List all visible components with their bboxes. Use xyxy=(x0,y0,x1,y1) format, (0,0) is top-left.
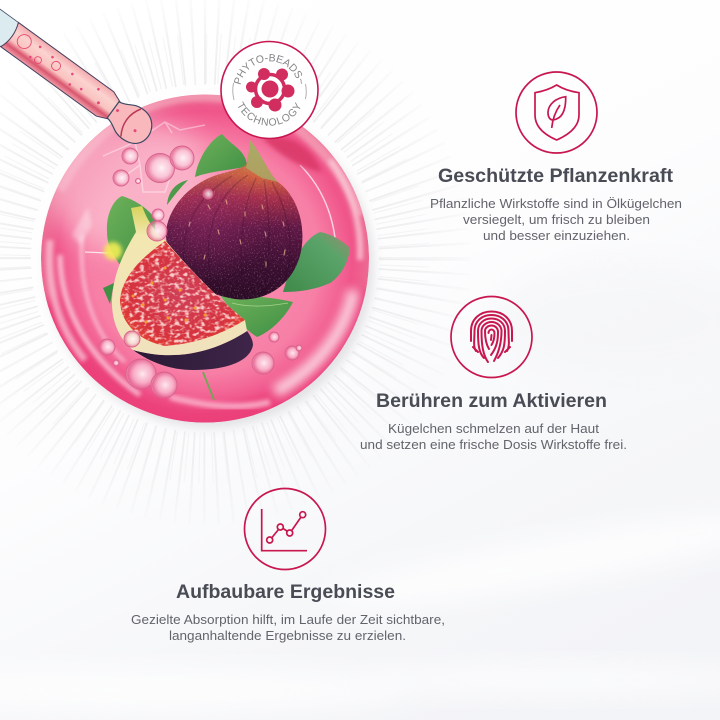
text: Geschützte Pflanzenkraft description: versiegelt, um frisch zu bleiben xyxy=(463,212,650,227)
molecule icon xyxy=(246,68,294,112)
text: Geschützte Pflanzenkraft description: und besser einzuziehen. xyxy=(483,228,630,243)
left white streak xyxy=(60,255,140,395)
icon: growth chart xyxy=(244,488,326,570)
top leaf xyxy=(195,134,247,177)
text: Aufbaubare Ergebnisse description: Gezielte Absorption hilft, im Laufe der Zeit sichtbare, xyxy=(131,612,445,627)
flesh seeds xyxy=(133,268,205,322)
ribs xyxy=(184,175,290,299)
icon: shield with leaf xyxy=(516,72,597,153)
bottom leaf xyxy=(220,295,293,337)
sparkle glow on left leaf xyxy=(104,242,122,260)
sparkle crystal xyxy=(72,207,92,245)
heading: Geschützte Pflanzenkraft: Geschützte Pflanzenkraft xyxy=(438,166,674,187)
radial light rays xyxy=(0,22,439,484)
text: Aufbaubare Ergebnisse description xyxy=(131,612,445,643)
slice cream rim xyxy=(112,206,247,355)
crimson reflection under badge xyxy=(262,137,322,172)
left leaf xyxy=(107,196,156,267)
fig slice xyxy=(112,206,253,370)
sphere shadow xyxy=(46,104,374,428)
stem highlight xyxy=(246,140,278,182)
liquid in tube xyxy=(1,22,124,123)
text: Aufbaubare Ergebnisse description: langanhaltende Ergebnisse zu erzielen. xyxy=(169,628,406,643)
pipette dropper xyxy=(0,0,159,150)
heading: Aufbaubare Ergebnisse: Aufbaubare Ergebnisse xyxy=(176,582,395,603)
internal bubbles xyxy=(12,32,64,76)
upper left pale glow xyxy=(45,117,215,253)
text: Berühren zum Aktivieren description: und setzen eine frische Dosis Wirkstoffe frei. xyxy=(360,437,627,452)
stem of leaf xyxy=(203,372,214,400)
bubbles xyxy=(99,146,302,398)
badge curved text top: PHYTO-BEADS~ xyxy=(234,54,302,84)
text: Geschützte Pflanzenkraft description: Pflanzliche Wirkstoffe sind in Ölkügelchen xyxy=(430,196,682,211)
text: Berühren zum Aktivieren description xyxy=(360,421,627,452)
fig speckle xyxy=(166,166,302,300)
text: Berühren zum Aktivieren description: Kügelchen schmelzen auf der Haut xyxy=(388,421,599,436)
seeds xyxy=(189,200,285,266)
top rim xyxy=(60,96,362,215)
right leaf xyxy=(283,232,350,292)
whole fig xyxy=(166,140,302,300)
flesh fibres xyxy=(120,242,243,346)
badge: phyto-beads technology xyxy=(220,40,319,140)
text: Geschützte Pflanzenkraft description xyxy=(430,196,682,243)
small leaf xyxy=(167,180,188,205)
bottom hot pink band xyxy=(46,290,366,420)
molecule lines xyxy=(103,122,205,192)
pink gel sphere xyxy=(41,94,369,422)
glass tube xyxy=(0,0,24,51)
heading: Berühren zum Aktivieren: Berühren zum Aktivieren xyxy=(376,391,607,412)
badge curved text bottom: TECHNOLOGY xyxy=(238,101,300,126)
slice flesh xyxy=(120,241,245,346)
right white streak xyxy=(275,290,354,392)
icon: fingerprint xyxy=(451,296,532,378)
liquid bulb tip xyxy=(103,95,159,150)
small lower leaf xyxy=(103,283,114,304)
slice skin xyxy=(133,331,253,370)
